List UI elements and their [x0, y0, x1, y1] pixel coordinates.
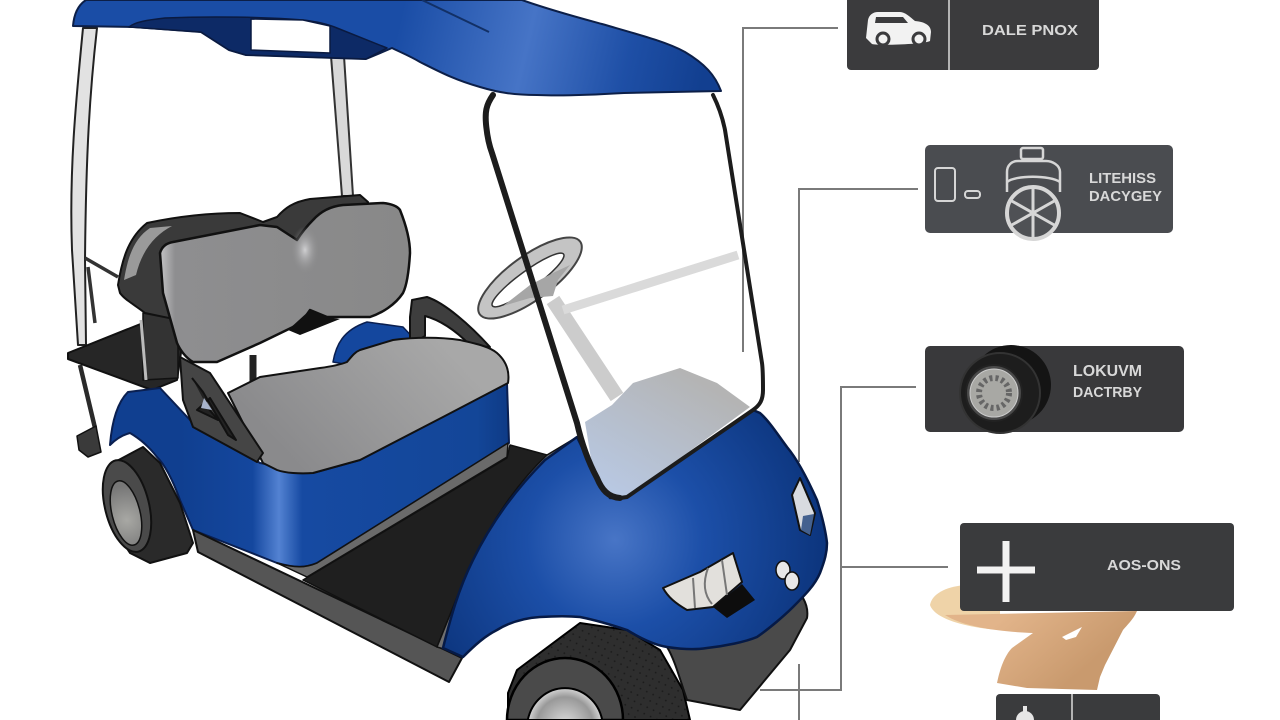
icon: plus [977, 541, 1035, 602]
small fog lights [776, 561, 799, 590]
disc [930, 585, 1000, 630]
golf cart [68, 0, 827, 720]
icon: motor and wheel [1007, 148, 1060, 239]
side rail [193, 530, 462, 682]
label [1089, 170, 1162, 205]
right rear roof post [331, 56, 353, 196]
label: LOKUVM [1073, 363, 1142, 380]
front bumper [667, 598, 807, 710]
panel: dale pnox [847, 0, 1099, 70]
left armrest [180, 357, 263, 462]
roof window [251, 19, 330, 53]
blue cowl behind seat [333, 322, 420, 365]
left rear roof post [71, 28, 118, 457]
windshield lower tint [585, 368, 750, 497]
headlight [663, 553, 742, 610]
right armrest [410, 297, 490, 347]
steering column [553, 300, 617, 397]
steering wheel [467, 224, 593, 332]
front body [443, 410, 827, 657]
rear platform [68, 323, 185, 390]
floor panel [303, 445, 547, 647]
front wheel [507, 623, 690, 720]
hand holding add-ons panel [930, 585, 1137, 690]
side marker light [792, 478, 815, 535]
front side band [437, 437, 580, 650]
panel: lithium battery [925, 145, 1173, 239]
panel: add-ons [960, 523, 1234, 611]
hand [945, 611, 1137, 690]
label: DACYGEY [1089, 188, 1162, 205]
finger gap [1062, 627, 1082, 640]
label: AOS-ONS [1107, 557, 1181, 574]
connector lines [743, 28, 948, 720]
windshield frame [486, 95, 763, 498]
seat back lower notch [288, 310, 340, 335]
icon: tire [960, 345, 1051, 433]
label: DACTRBY [1073, 384, 1142, 401]
label: DALE PNOX [982, 22, 1078, 39]
icon: bottom panel glyph [1016, 706, 1034, 720]
rear wheel [94, 447, 193, 563]
seat cushion [228, 338, 508, 473]
roof canopy [73, 0, 721, 95]
icon: car [866, 12, 931, 45]
seat back frame [118, 195, 368, 385]
label: LITEHISS [1089, 170, 1156, 187]
air intake [713, 584, 755, 618]
seat base trim [277, 443, 508, 577]
label [1073, 363, 1142, 401]
panel: bottom cropped [996, 694, 1160, 720]
seat back highlight [291, 226, 319, 274]
icon: battery [935, 168, 980, 201]
seat back cushion [160, 203, 410, 362]
seat base body [110, 383, 509, 567]
windshield reflection bar [563, 255, 738, 310]
panel: lokum battery [925, 345, 1184, 433]
